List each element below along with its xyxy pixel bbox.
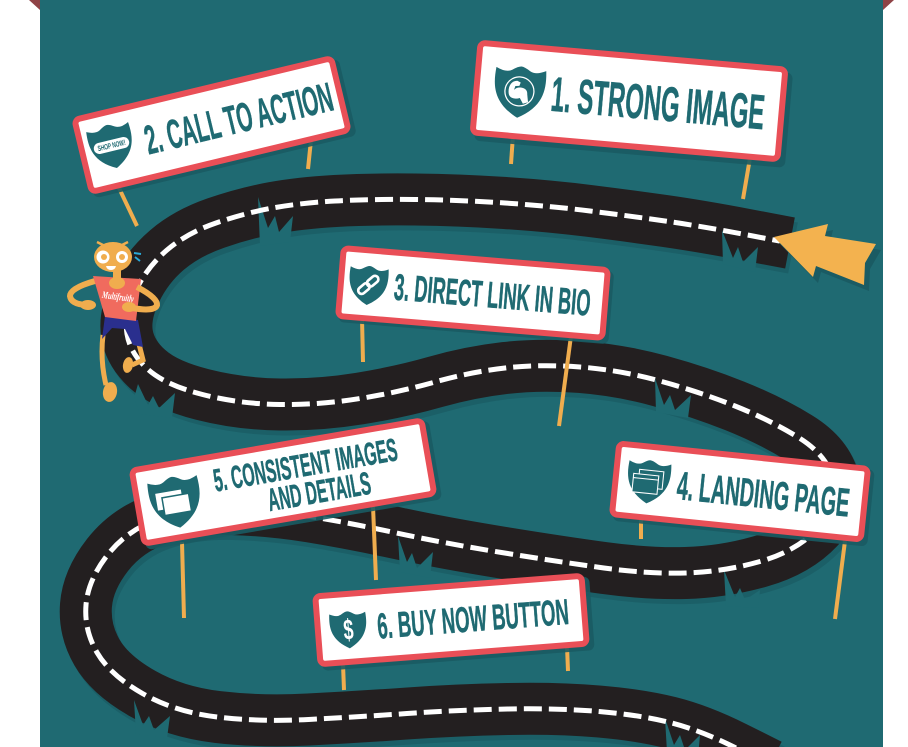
- antennae: [97, 242, 128, 246]
- heading: step 6: 6. BUY NOW BUTTON: [376, 591, 570, 647]
- sign 6: buy now button: [315, 575, 595, 671]
- sign 5: consistent images and details: [132, 419, 442, 550]
- shirt: [93, 276, 141, 321]
- right arm: [132, 287, 157, 309]
- sign 4: landing page: [611, 444, 875, 547]
- legs: [102, 335, 143, 385]
- icon: shield with flexed arm: [492, 64, 547, 120]
- top corner ribbon folds: [29, 0, 894, 10]
- icon: shield with dollar sign: [329, 610, 368, 650]
- arrow: road start: [774, 224, 881, 291]
- sign 5: consistent images and details: AND DETAILS: [265, 465, 373, 518]
- head: [94, 242, 132, 272]
- icon: shield with chain link: [347, 264, 389, 307]
- left arm: [70, 281, 95, 305]
- icon: shield with dollar sign: $: [342, 614, 355, 647]
- sign 3: direct link in bio: [338, 248, 614, 344]
- sign 2: call to action: [75, 57, 357, 199]
- icon: shield with stacked images: [146, 473, 205, 532]
- shirt logo: Multifruitly: [101, 290, 135, 305]
- winding road: [86, 197, 838, 747]
- heading: step 2: 2. CALL TO ACTION: [140, 74, 337, 163]
- sweat drops: [134, 253, 141, 261]
- sign 1: strong image: [472, 43, 793, 168]
- icon: shield with browser windows: [625, 458, 672, 506]
- sign 3: direct link in bio: 3. DIRECT LINK IN BIO: [393, 267, 592, 324]
- icon: shield shop now: [85, 120, 138, 173]
- shorts: [102, 316, 143, 347]
- icon: shield shop now: SHOP NOW!: [97, 138, 126, 153]
- character: running mascot: [70, 242, 157, 403]
- heading: step 5: 5. CONSISTENT IMAGES: [211, 431, 400, 499]
- sign posts: [119, 135, 845, 690]
